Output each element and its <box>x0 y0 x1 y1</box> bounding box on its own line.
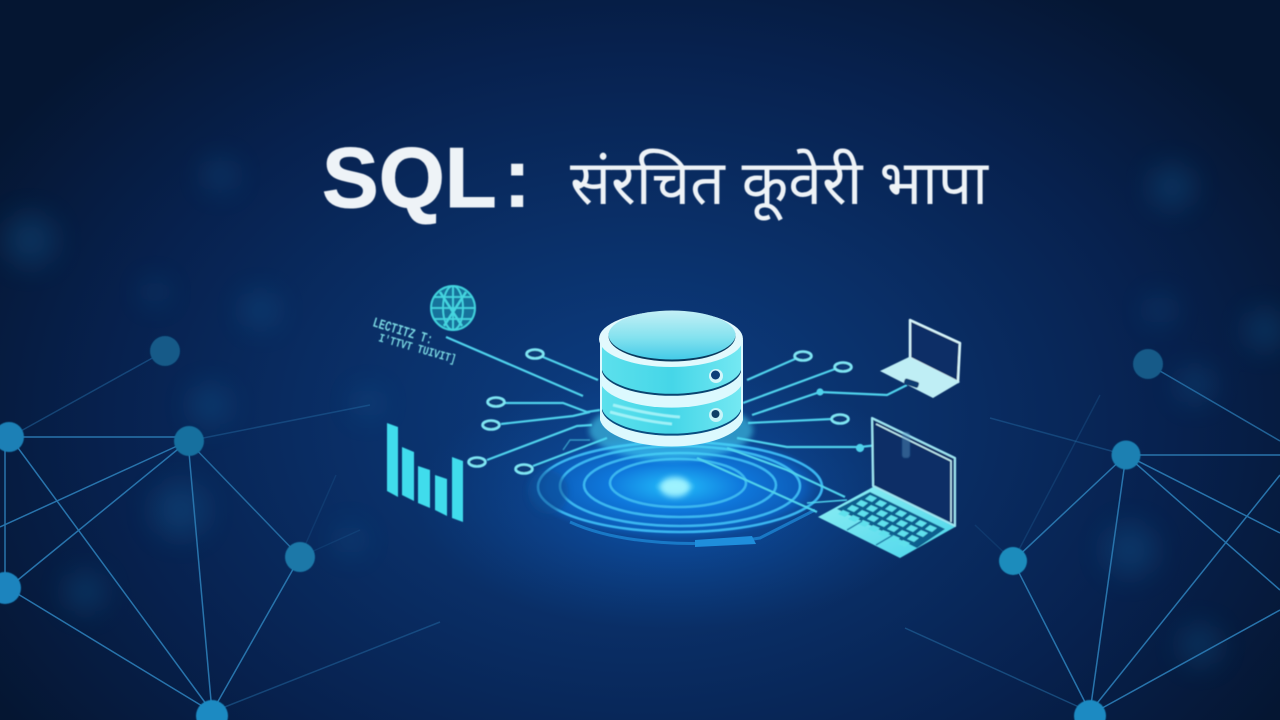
node <box>174 426 204 456</box>
node <box>196 700 228 720</box>
node <box>285 542 315 572</box>
node <box>0 572 21 604</box>
node <box>1112 440 1140 470</box>
title <box>322 131 989 226</box>
network: right <box>905 349 1280 720</box>
icon: small laptop <box>880 320 960 398</box>
drive light upper <box>709 369 723 383</box>
connector lines: left <box>446 337 607 474</box>
small label text <box>371 315 458 367</box>
ring terminals <box>468 350 544 474</box>
database cylinder <box>589 310 753 460</box>
title: Hindi text: संरचित कूवेरी भापा <box>570 148 989 222</box>
bokeh background lights <box>4 159 1280 665</box>
title: SQL: SQL <box>322 131 497 226</box>
bottom disk <box>600 375 743 446</box>
icon: large laptop <box>818 418 955 558</box>
node <box>1074 700 1106 720</box>
drive light lower <box>709 408 723 422</box>
touchpad lines <box>847 521 893 545</box>
bar chart icon <box>387 423 463 522</box>
middle disk <box>600 340 743 408</box>
keyboard keys <box>838 495 937 547</box>
top cap <box>599 311 743 367</box>
label line 1: LECTITZ T: <box>371 315 435 349</box>
icon: globe <box>431 286 475 330</box>
ring terminals <box>794 352 852 424</box>
node <box>999 547 1027 575</box>
connector lines: right <box>697 352 907 512</box>
label line 2: I'TTVT TUIVIT] <box>377 331 458 367</box>
node <box>150 336 180 366</box>
holographic disc <box>525 431 825 547</box>
node <box>0 422 24 452</box>
node <box>1133 349 1163 379</box>
title: colon: : <box>503 131 531 226</box>
network: left <box>0 336 440 720</box>
